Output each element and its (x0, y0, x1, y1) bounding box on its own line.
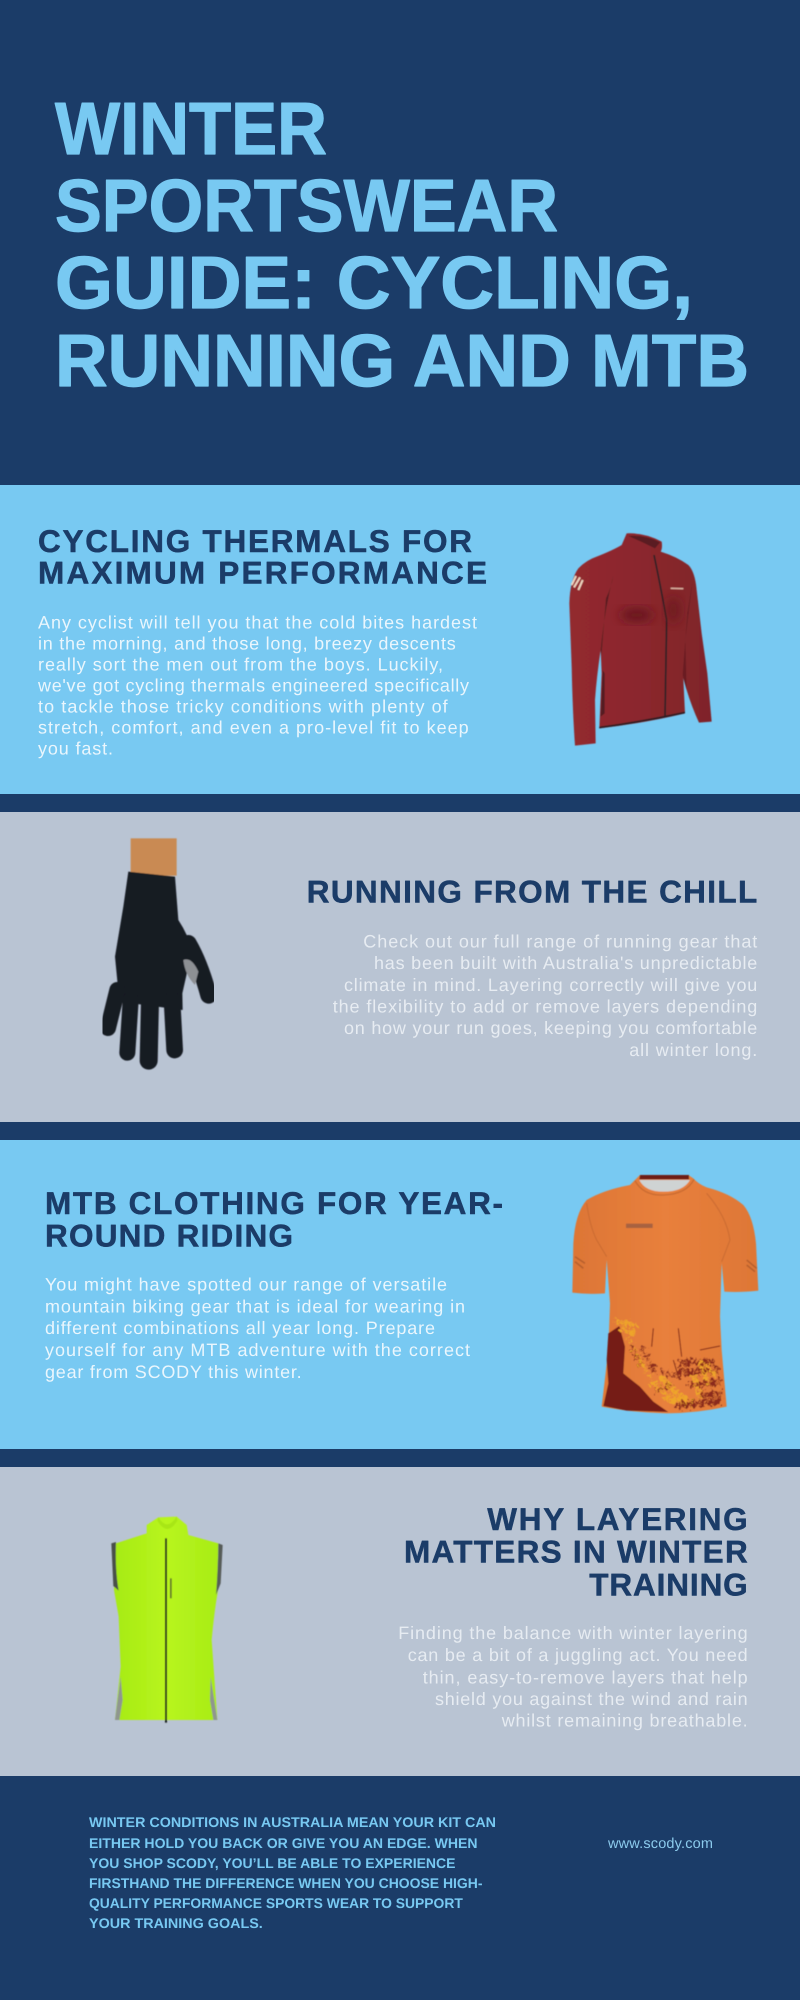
text block: cycling thermals: we've got cycling thermals engineered specifically (37, 675, 469, 695)
heading: MTB clothing (45, 1185, 503, 1254)
text block: cycling thermals: really sort the men out from the boys. Luckily, (38, 654, 443, 674)
text block: closing message: YOU SHOP SCODY, YOU’LL BE ABLE TO EXPERIENCE (89, 1855, 456, 1871)
text block: MTB clothing: different combinations all year long. Prepare (45, 1318, 435, 1338)
icon: black running glove (108, 838, 209, 1061)
text block: cycling thermals: you fast. (38, 738, 113, 758)
heading: why layering matters: TRAINING (589, 1566, 748, 1602)
text block: closing message: QUALITY PERFORMANCE SPORTS WEAR TO SUPPORT (89, 1895, 463, 1911)
text block: closing message: EITHER HOLD YOU BACK OR GIVE YOU AN EDGE. WHEN (89, 1835, 478, 1851)
text block: why layering matters: can be a bit of a juggling act. You need (408, 1645, 748, 1665)
heading: cycling thermals: MAXIMUM PERFORMANCE (38, 554, 487, 590)
text block: running: Check out our full range of running gear that (363, 931, 757, 951)
heading: why layering matters: MATTERS IN WINTER (404, 1534, 748, 1570)
text block: MTB clothing: You might have spotted our range of versatile (45, 1275, 447, 1295)
text block: cycling thermals: in the morning, and those long, breezy descents (38, 633, 456, 653)
text block: MTB clothing: mountain biking gear that is ideal for wearing in (45, 1296, 465, 1316)
title: SPORTSWEAR (55, 164, 558, 247)
text block: closing message: FIRSTHAND THE DIFFERENCE WHEN YOU CHOOSE HIGH- (89, 1875, 483, 1891)
website link: www.scody.com (607, 1836, 713, 1852)
footer (89, 1814, 713, 1931)
heading: running: RUNNING FROM THE CHILL (307, 874, 757, 910)
text block: running: the flexibility to add or remove layers depending (333, 997, 757, 1017)
heading: why layering matters (404, 1501, 748, 1602)
text block: why layering matters: whilst remaining breathable. (501, 1711, 748, 1731)
heading: why layering matters: WHY LAYERING (487, 1501, 748, 1537)
panel: cycling thermals (0, 485, 800, 794)
text block: running: all winter long. (629, 1040, 757, 1060)
text block: closing message: YOUR TRAINING GOALS. (89, 1915, 263, 1931)
title: RUNNING AND MTB (55, 319, 749, 402)
heading: cycling thermals (38, 523, 487, 590)
text block: closing message (89, 1814, 496, 1931)
heading: MTB clothing: MTB CLOTHING FOR YEAR- (45, 1185, 503, 1221)
text block: cycling thermals: to tackle those tricky conditions with plenty of (38, 696, 449, 716)
text block: why layering matters (398, 1623, 748, 1731)
icon: orange running shirt (572, 1175, 758, 1413)
icon: hi-vis cycling vest (111, 1517, 223, 1723)
text block: why layering matters: thin, easy-to-remove layers that help (423, 1667, 748, 1687)
shirt print: splatter (615, 1322, 722, 1407)
text block: running: climate in mind. Layering correctly will give you (344, 975, 757, 995)
text block: cycling thermals: Any cyclist will tell you that the cold bites hardest (38, 612, 477, 632)
panel: MTB clothing (0, 1140, 800, 1449)
text block: closing message: WINTER CONDITIONS IN AUSTRALIA MEAN YOUR KIT CAN (89, 1814, 496, 1830)
text block: why layering matters: Finding the balance with winter layering (398, 1623, 748, 1643)
panel: running (0, 812, 800, 1122)
text block: MTB clothing (45, 1275, 470, 1382)
text block: MTB clothing: gear from SCODY this winter. (45, 1362, 302, 1382)
title (55, 87, 749, 402)
icon: red cycling jacket (569, 533, 712, 746)
text block: MTB clothing: yourself for any MTB adventure with the correct (45, 1340, 470, 1360)
panel: why layering matters (0, 1467, 800, 1776)
title: WINTER (55, 87, 327, 170)
text block: running (333, 931, 757, 1060)
text block: running: on how your run goes, keeping you comfortable (344, 1018, 757, 1038)
heading: MTB clothing: ROUND RIDING (45, 1218, 293, 1254)
title: GUIDE: CYCLING, (55, 241, 693, 324)
text block: running: has been built with Australia's unpredictable (374, 953, 757, 973)
text block: cycling thermals (37, 612, 477, 758)
text block: why layering matters: shield you against the wind and rain (435, 1689, 748, 1709)
text block: cycling thermals: stretch, comfort, and even a pro-level fit to keep (38, 717, 469, 737)
shirt print: dark splash (603, 1326, 668, 1412)
heading: cycling thermals: CYCLING THERMALS FOR (38, 523, 472, 559)
